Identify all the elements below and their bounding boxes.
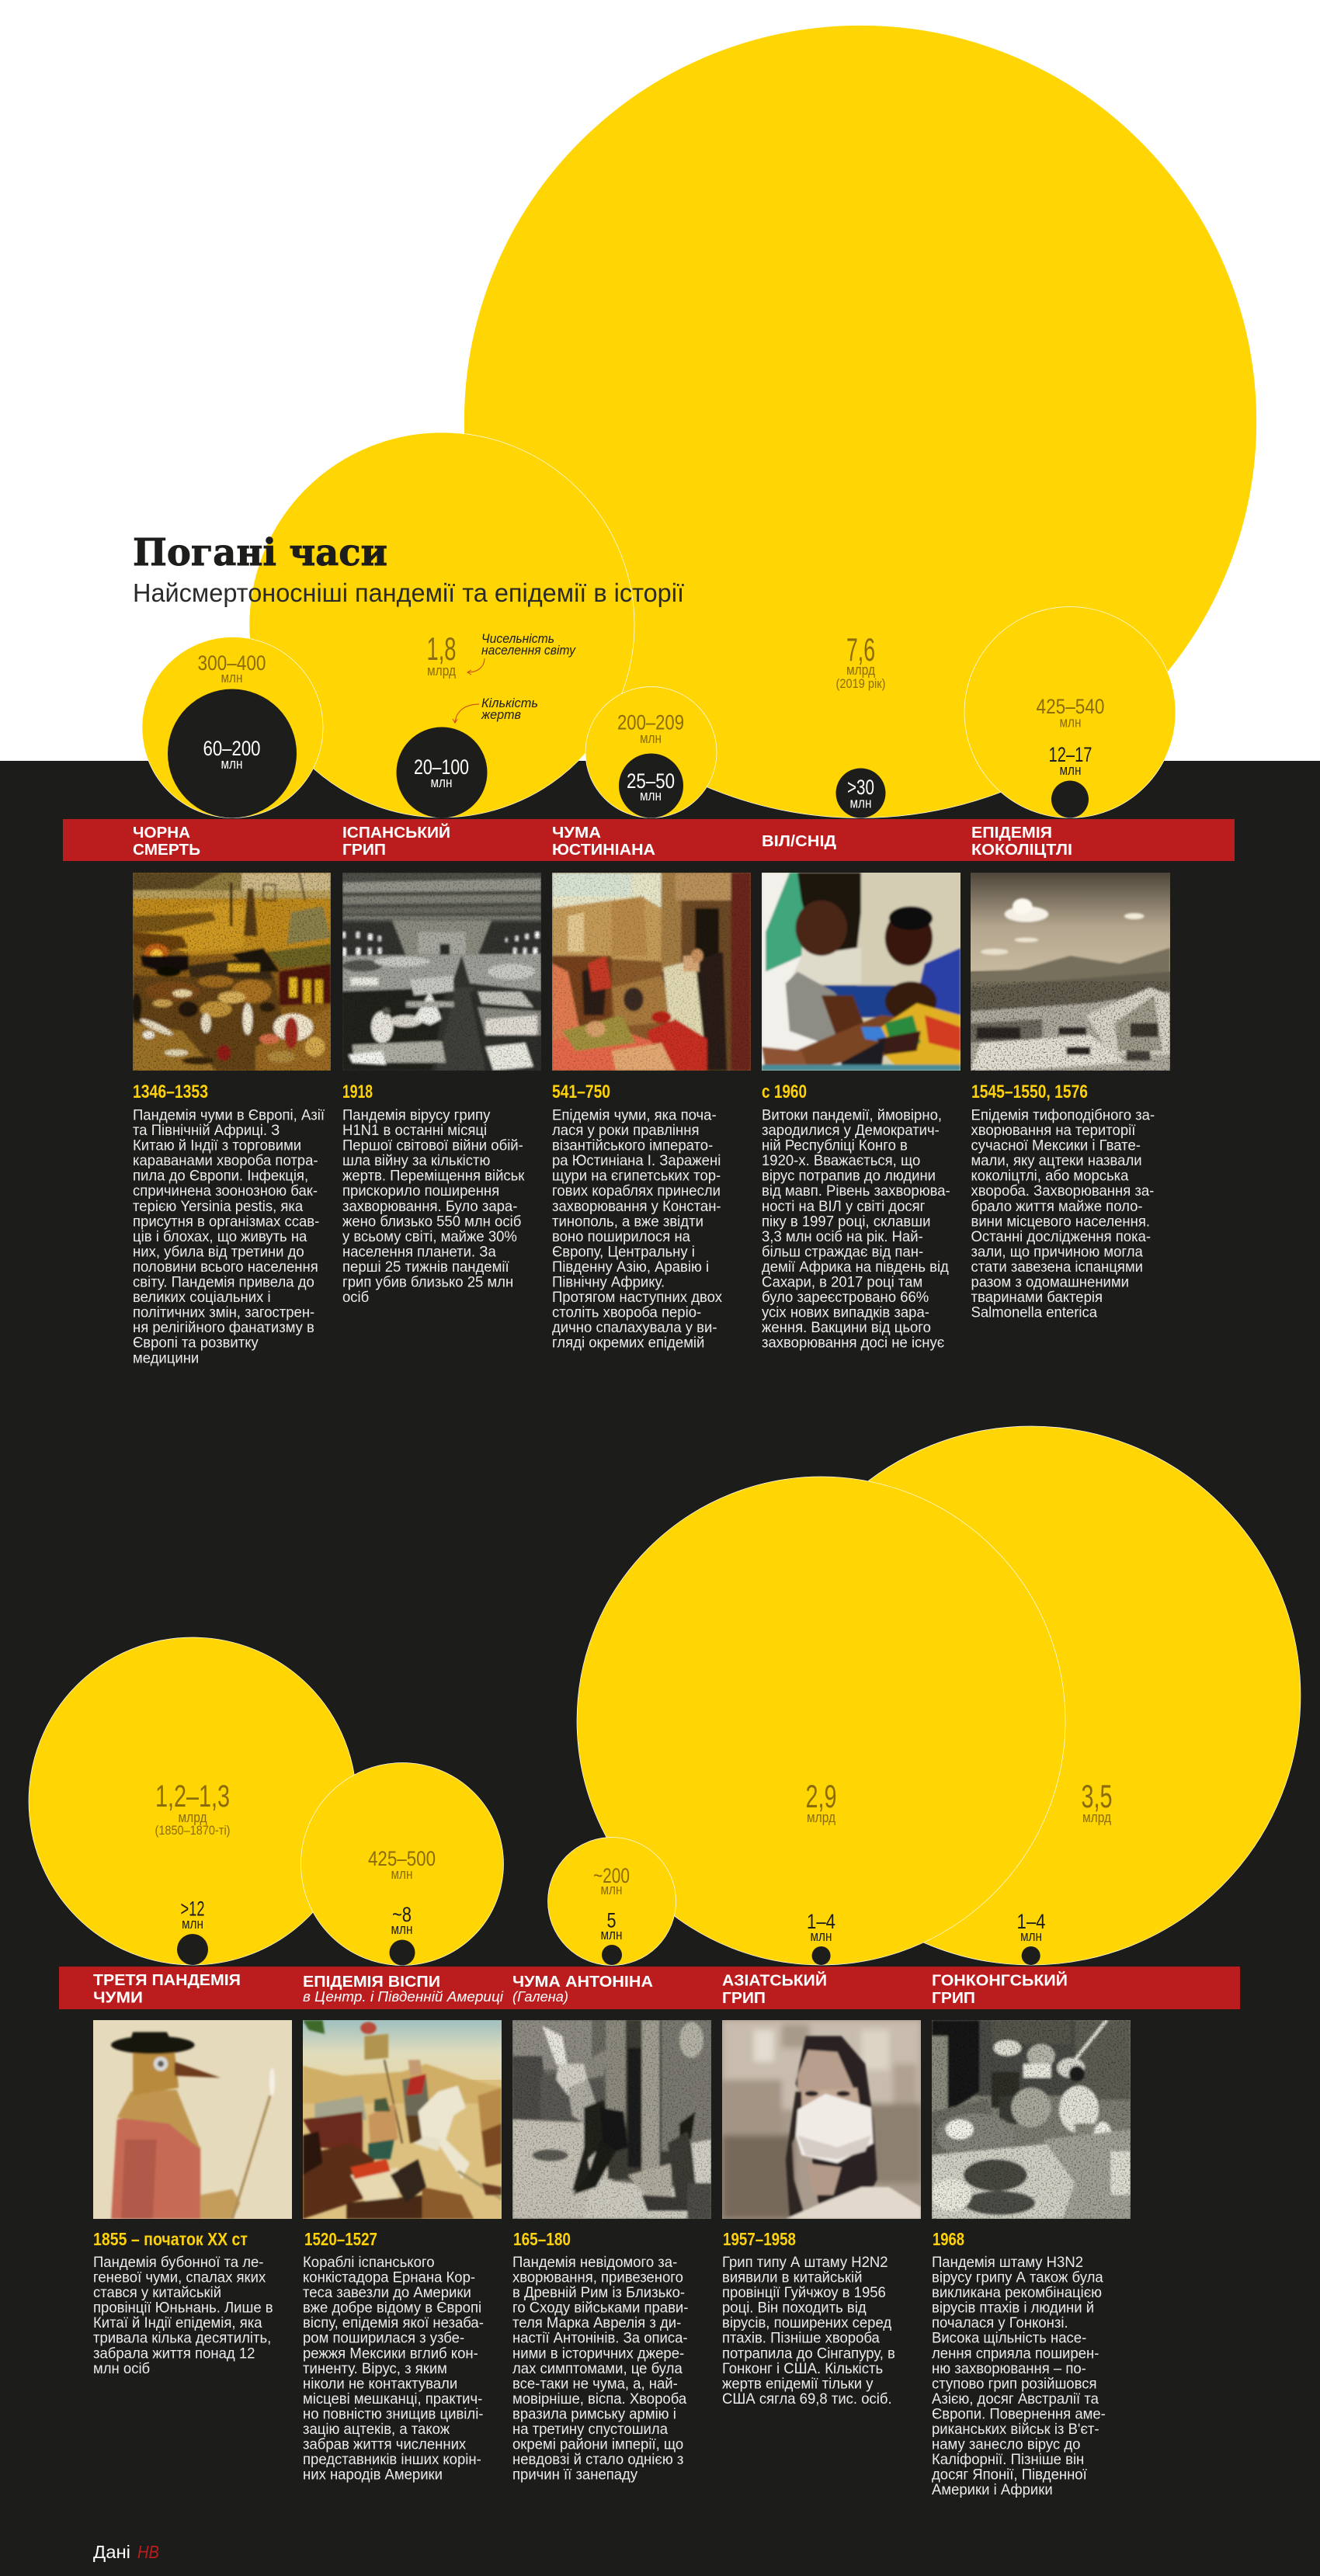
- heading: ГРИП: [932, 1990, 975, 2007]
- body text: спричинена зоонозною бак-: [133, 1182, 318, 1199]
- body text: невдовзі й стало однією з: [512, 2451, 683, 2467]
- heading: КОКОЛІЦТЛІ: [971, 842, 1072, 859]
- body text: місцеві мешканці, практич-: [303, 2390, 482, 2407]
- bubble: Asian flu: млрд: [807, 1810, 835, 1825]
- body text: перші 25 тижнів пандемії: [342, 1258, 509, 1275]
- body text: стався у китайській: [93, 2284, 221, 2300]
- body text: хворювання на території: [971, 1122, 1136, 1138]
- body text: мали, яку ацтеки назвали: [971, 1152, 1142, 1168]
- bubble: Smallpox epidemic: 425–500: [368, 1847, 436, 1870]
- bubble chart: second row of epidemics: [29, 1426, 1301, 1966]
- body text: ній Республіці Конго в: [762, 1137, 908, 1154]
- body text: Китаю й Індії з торговими: [133, 1137, 301, 1154]
- body text: но повністю знищив цивілі-: [303, 2405, 483, 2422]
- panel: Spanish flu: [342, 823, 541, 1305]
- body text: конкістадора Ернана Кор-: [303, 2269, 475, 2286]
- bubble: Black Death: млн: [221, 670, 242, 686]
- heading: ІСПАНСЬКИЙ: [342, 823, 450, 842]
- body text: тинополь, а вже звідти: [552, 1213, 703, 1229]
- body text: вірус потрапив до людини: [762, 1167, 936, 1184]
- panel: Cocoliztli epidemic: [971, 825, 1170, 1321]
- body text: брало життя майже поло-: [971, 1198, 1143, 1214]
- heading: [93, 1972, 241, 2006]
- body text: політичних змін, загострен-: [133, 1304, 314, 1321]
- body text: дично спалахувала у ви-: [552, 1319, 717, 1335]
- bubble: HIV/AIDS: 7,6: [846, 631, 875, 668]
- panel: Plague of Justinian: [552, 825, 751, 1351]
- heading: ЮСТИНІАНА: [552, 842, 655, 859]
- body text: грип убив близько 25 млн: [342, 1273, 513, 1290]
- bubble: Spanish flu: млрд: [427, 663, 456, 679]
- heading: ГРИП: [342, 842, 386, 859]
- panel: Black Death: [132, 825, 331, 1366]
- body text: тиненту. Вірус, з яким: [303, 2360, 447, 2376]
- body text: них народів Америки: [303, 2466, 443, 2483]
- bubble: Antonine plague: 5: [607, 1908, 617, 1932]
- bubble: Third plague pandemic: [29, 1637, 356, 1965]
- heading: [552, 825, 655, 859]
- body text: наму занесло вірус до: [932, 2435, 1080, 2453]
- bubble: Hong Kong flu: млрд: [1082, 1810, 1111, 1825]
- body text: караванами хвороба потра-: [133, 1152, 318, 1168]
- bubble: Asian flu: млн: [811, 1929, 832, 1944]
- heading: СМЕРТЬ: [133, 842, 200, 859]
- bubble: Black Death: 300–400: [197, 651, 266, 675]
- body text: ності на ВІЛ у світі досяг: [762, 1198, 926, 1214]
- body text: мовірніше, віспа. Хвороба: [512, 2390, 687, 2407]
- body text: віспу, епідемія якої незаба-: [303, 2314, 484, 2331]
- body text: Пандемія бубонної та ле-: [93, 2254, 263, 2270]
- bubble: Cocoliztli epidemic: 425–540: [1036, 695, 1104, 718]
- bubble: Antonine plague: ~200: [593, 1864, 630, 1887]
- body text: присутня в організмах ссав-: [133, 1213, 319, 1229]
- body text: пила до Європи. Інфекція,: [133, 1167, 308, 1184]
- bubble: Hong Kong flu: 1–4: [1017, 1910, 1045, 1933]
- bubble: Third plague pandemic: 1,2–1,3: [155, 1779, 230, 1814]
- body text: окремі райони імперії, що: [512, 2435, 683, 2453]
- body text: ження. Вакцини від цього: [762, 1319, 931, 1335]
- body text: Китаї й Індії епідемія, яка: [93, 2314, 262, 2331]
- date: 165–180: [513, 2229, 571, 2249]
- heading: [932, 1970, 1068, 2007]
- body text: на третину спустошила: [512, 2421, 669, 2437]
- body text: Висока щільність насе-: [932, 2330, 1086, 2346]
- heading: ВІЛ/СНІД: [762, 833, 836, 850]
- body text: хворювання, привезеного: [512, 2269, 683, 2286]
- body text: Кораблі іспанського: [303, 2254, 435, 2270]
- body text: теса завезли до Америки: [303, 2284, 471, 2300]
- panel: Third plague pandemic: [93, 1972, 292, 2376]
- bubble: Smallpox epidemic: ~8: [392, 1903, 412, 1926]
- bubble: Plague of Justinian: млн: [640, 731, 662, 746]
- bubble: Cocoliztli epidemic: млн: [1059, 762, 1081, 778]
- legend note: number of victims: Кількість: [481, 696, 538, 710]
- bubble: Smallpox epidemic: [301, 1762, 503, 1966]
- bubble: Hong Kong flu: 3,5: [1081, 1778, 1112, 1814]
- title block: [133, 531, 684, 607]
- heading: [133, 825, 200, 859]
- bubble: Plague of Justinian: 200–209: [617, 711, 684, 734]
- date: 1346–1353: [133, 1081, 208, 1102]
- bubble: Plague of Justinian: [585, 686, 717, 818]
- bubble: Asian flu: 2,9: [806, 1778, 837, 1814]
- body text: великих соціальних і: [133, 1289, 271, 1305]
- body text: ними в історичних джере-: [512, 2345, 684, 2361]
- body text: 3,3 млн осіб на рік. Най-: [762, 1228, 923, 1245]
- red heading band: second row: [59, 1967, 1240, 2009]
- body text: захворювання. Було зара-: [342, 1198, 517, 1214]
- body text: зацію ацтеків, а також: [303, 2421, 450, 2437]
- body text: ня релігійного фанатизму в: [133, 1319, 314, 1335]
- photo: poultry market: [932, 2020, 1131, 2219]
- body text: птахів. Пізніше хвороба: [722, 2330, 880, 2346]
- legend note: world population: [467, 631, 576, 675]
- bubble: Asian flu: [577, 1477, 1065, 1965]
- body text: Першої світової війни обій-: [342, 1137, 523, 1154]
- body text: провінції Юньнань. Лише в: [93, 2299, 273, 2316]
- body text: населення планети. За: [342, 1243, 496, 1260]
- photo: child receiving care: [762, 873, 960, 1071]
- body text: Америки і Африки: [932, 2481, 1053, 2498]
- body text: вірусів, поширених серед: [722, 2314, 891, 2331]
- photo: field hospital ward: [342, 873, 541, 1071]
- body text: піку в 1997 році, склавши: [762, 1213, 930, 1229]
- body text: Європу, Центральну і: [552, 1243, 695, 1260]
- body text: Епідемія чуми, яка поча-: [552, 1106, 717, 1123]
- body text: лася у роки правління: [552, 1122, 700, 1138]
- body text: коколіцтлі, або морська: [971, 1167, 1129, 1184]
- date: 541–750: [552, 1081, 610, 1102]
- bubble: Antonine plague: млн: [601, 1882, 623, 1897]
- panel: Antonine plague: [512, 1974, 711, 2483]
- body text: Гонконг і США. Кількість: [722, 2360, 883, 2376]
- body text: причин її занепаду: [512, 2466, 638, 2483]
- body text: ра Юстиніана І. Заражені: [552, 1152, 721, 1168]
- title: Погані часи: [133, 531, 387, 575]
- bubble: Antonine plague: [548, 1837, 676, 1966]
- panel: HIV/AIDS: [762, 833, 960, 1351]
- body text: Salmonella enterica: [971, 1304, 1098, 1321]
- body text: лах симптомами, це була: [512, 2360, 683, 2376]
- heading: (Галена): [512, 1989, 568, 2005]
- bubble: Antonine plague: млн: [601, 1927, 623, 1942]
- bubble: Cocoliztli epidemic: [964, 607, 1176, 818]
- body text: Північну Африку.: [552, 1273, 665, 1290]
- date: 1520–1527: [304, 2229, 377, 2249]
- body text: Пандемія чуми в Європі, Азії: [133, 1106, 325, 1123]
- photo: woman in a medical mask: [722, 2020, 921, 2219]
- bubble: Spanish flu: 1,8: [427, 630, 457, 667]
- date: 1918: [342, 1081, 373, 1102]
- bubble: Spanish flu: 20–100: [414, 755, 469, 779]
- body text: половини всього населення: [133, 1258, 318, 1275]
- body text: століть хвороба періо-: [552, 1304, 701, 1321]
- body text: вини місцевого населення.: [971, 1213, 1150, 1229]
- body text: та Північній Африці. З: [133, 1122, 280, 1138]
- body text: Пандемія невідомого за-: [512, 2254, 677, 2270]
- body text: вірусу грипу А також була: [932, 2269, 1103, 2286]
- body text: жертв епідемії тільки у: [722, 2375, 874, 2391]
- date: с 1960: [762, 1081, 807, 1102]
- bubble: Black Death: 60–200: [203, 737, 261, 760]
- bubble: HIV/AIDS: (2019 рік): [835, 676, 885, 691]
- body text: захворювання досі не існує: [762, 1335, 945, 1351]
- heading: в Центр. і Південній Америці: [303, 1989, 504, 2005]
- body text: провінції Гуйчжоу в 1956: [722, 2284, 886, 2300]
- body text: демії Африка на південь від: [762, 1258, 949, 1275]
- heading: ЧУМА АНТОНІНА: [512, 1974, 653, 1991]
- source credit: НВ: [137, 2542, 159, 2562]
- body text: сучасної Мексики і Гвате-: [971, 1137, 1141, 1154]
- legend note: number of victims: жертв: [481, 707, 521, 722]
- body text: ців і блохах, що живуть на: [133, 1228, 307, 1245]
- body text: зародилися у Демократич-: [762, 1122, 940, 1138]
- heading: АЗІАТСЬКИЙ: [722, 1970, 827, 1989]
- body text: почалася у Гонконзі.: [932, 2314, 1068, 2331]
- heading: ЧУМИ: [93, 1989, 143, 2006]
- bubble: Third plague pandemic: млн: [182, 1916, 203, 1932]
- body text: гляді окремих епідемій: [552, 1335, 704, 1351]
- bubble: Spanish flu: [249, 432, 634, 818]
- body text: візантійського імперато-: [552, 1137, 713, 1154]
- body text: ром поширилася з узбе-: [303, 2330, 464, 2346]
- heading: ГОНКОНГСЬКИЙ: [932, 1970, 1068, 1989]
- date: 1855 – початок ХХ ст: [93, 2229, 248, 2249]
- date: 1968: [933, 2229, 964, 2249]
- body text: вже добре відому в Європі: [303, 2299, 481, 2316]
- body text: більш страждає від пан-: [762, 1243, 923, 1260]
- bubble: Asian flu: 1–4: [807, 1910, 835, 1933]
- body text: хвороба. Захворювання за-: [971, 1182, 1154, 1199]
- heading: [303, 1974, 504, 2005]
- panel: Smallpox epidemic: [303, 1974, 504, 2483]
- body text: вразила римську армію і: [512, 2405, 676, 2422]
- body text: жено близько 550 млн осіб: [342, 1213, 521, 1229]
- heading: [342, 823, 450, 859]
- body text: захворювання у Констан-: [552, 1198, 721, 1214]
- heading: ЧОРНА: [133, 825, 190, 842]
- heading: ЕПІДЕМІЯ ВІСПИ: [303, 1974, 440, 1991]
- body text: було зареєстровано 66%: [762, 1289, 929, 1305]
- photo: plague doctor illustration: [93, 2020, 292, 2219]
- heading: ГРИП: [722, 1990, 766, 2007]
- body text: Останні дослідження пока-: [971, 1228, 1151, 1245]
- body text: прискорило поширення: [342, 1182, 499, 1199]
- bubble: Third plague pandemic: млрд: [179, 1810, 207, 1825]
- bubble: HIV/AIDS: >30: [847, 776, 874, 799]
- body text: гових кораблях принесли: [552, 1182, 721, 1199]
- red heading band: first row: [63, 819, 1235, 861]
- body text: усіх нових випадків зара-: [762, 1304, 929, 1321]
- body text: досяг Японії, Південної: [932, 2466, 1088, 2483]
- date: 1545–1550, 1576: [971, 1081, 1088, 1102]
- photo: Teotihuacan landscape: [971, 873, 1170, 1071]
- body text: них, убила від третини до: [133, 1243, 304, 1260]
- body text: Азією, досяг Австралії та: [932, 2390, 1099, 2407]
- body text: Протягом наступних двох: [552, 1289, 723, 1305]
- body text: Пандемія вірусу грипу: [342, 1106, 491, 1123]
- heading: [722, 1970, 827, 2007]
- body text: викликана рекомбінацією: [932, 2284, 1102, 2300]
- body text: представників інших корін-: [303, 2451, 481, 2467]
- bubble: HIV/AIDS: [464, 25, 1256, 818]
- body text: го Сходу військами прави-: [512, 2299, 688, 2316]
- photo: Triumph of Death painting: [133, 873, 331, 1071]
- bubble: Third plague pandemic: >12: [180, 1897, 205, 1921]
- body text: виявили в китайській: [722, 2269, 862, 2286]
- body text: терією Yersinia pestis, яка: [133, 1198, 304, 1214]
- source credit: [93, 2542, 159, 2562]
- body text: геневої чуми, спалах яких: [93, 2269, 266, 2286]
- legend note: world population: Чисельність: [481, 631, 554, 646]
- body text: лення сприяла поширен-: [932, 2345, 1099, 2361]
- body text: Грип типу А штаму H2N2: [722, 2254, 888, 2270]
- bubble: Smallpox epidemic: млн: [391, 1866, 413, 1882]
- body text: Сахари, в 2017 році там: [762, 1273, 922, 1290]
- legend note: world population: населення світу: [481, 643, 576, 658]
- body text: Витоки пандемії, ймовірно,: [762, 1106, 942, 1123]
- bubble: Plague of Justinian: млн: [640, 788, 662, 804]
- photo: angel of death engraving: [512, 2020, 711, 2219]
- body text: Каліфорнії. Пізніше він: [932, 2451, 1084, 2467]
- body text: осіб: [342, 1289, 369, 1305]
- subtitle: Найсмертоносніші пандемії та епідемії в історії: [133, 578, 684, 607]
- heading: ЕПІДЕМІЯ: [971, 825, 1052, 842]
- body text: тривала кілька десятиліть,: [93, 2330, 271, 2346]
- heading: ЧУМА: [552, 825, 601, 842]
- bubble: HIV/AIDS: млн: [849, 795, 871, 811]
- body text: зали, що причиною могла: [971, 1243, 1143, 1260]
- body text: H1N1 в останні місяці: [342, 1122, 487, 1138]
- body text: медицини: [133, 1349, 199, 1366]
- body text: 1920-х. Вважається, що: [762, 1152, 920, 1168]
- body text: Південну Азію, Аравію і: [552, 1258, 709, 1275]
- body text: воно поширилося на: [552, 1228, 691, 1245]
- source credit: Дані: [93, 2542, 130, 2562]
- body text: теля Марка Аврелія з ди-: [512, 2314, 681, 2331]
- body text: у всьому світі, майже 30%: [342, 1228, 517, 1245]
- body text: разом з одомашненими: [971, 1273, 1129, 1290]
- background: dark lower area: [0, 761, 1320, 2576]
- body text: ступово грип розійшовся: [932, 2375, 1097, 2391]
- body text: Європи. Повернення аме-: [932, 2405, 1106, 2422]
- body text: жертв. Переміщення військ: [342, 1167, 525, 1184]
- body text: вірусів птахів і людини й: [932, 2299, 1094, 2316]
- bubble: Cocoliztli epidemic: млн: [1059, 714, 1081, 730]
- body text: Європі та розвитку: [133, 1335, 259, 1351]
- bubble: Third plague pandemic: (1850–1870-ті): [155, 1823, 230, 1838]
- body text: шла війну за кількістю: [342, 1152, 490, 1168]
- body text: все-таки не чума, а, най-: [512, 2375, 678, 2391]
- body text: риканських військ із В'єт-: [932, 2421, 1099, 2437]
- body text: режжя Мексики вглиб кон-: [303, 2345, 478, 2361]
- photo: plague painting: [552, 873, 751, 1071]
- bubble: Plague of Justinian: 25–50: [627, 769, 675, 793]
- body text: Епідемія тифоподібного за-: [971, 1106, 1155, 1123]
- bubble: Cocoliztli epidemic: 12–17: [1048, 743, 1092, 766]
- panel: Asian flu: [722, 1970, 921, 2407]
- bubble chart: first row of epidemics: [142, 25, 1256, 818]
- body text: світу. Пандемія привела до: [133, 1273, 314, 1290]
- body text: настії Антонінів. За описа-: [512, 2330, 688, 2346]
- heading: [512, 1974, 653, 2005]
- body text: потрапила до Сінгапуру, в: [722, 2345, 895, 2361]
- body text: млн осіб: [93, 2360, 150, 2376]
- heading: ТРЕТЯ ПАНДЕМІЯ: [93, 1972, 241, 1989]
- body text: забрав життя численних: [303, 2435, 467, 2453]
- body text: в Древній Рим із Близько-: [512, 2284, 685, 2300]
- photo: conquest painting: [303, 2020, 502, 2219]
- body text: Пандемія штаму H3N2: [932, 2254, 1083, 2270]
- bubble: Hong Kong flu: [762, 1426, 1301, 1965]
- body text: щури на єгипетських тор-: [552, 1167, 721, 1184]
- body text: ню захворювання – по-: [932, 2360, 1086, 2376]
- bubble: Hong Kong flu: млн: [1020, 1929, 1042, 1944]
- legend note: number of victims: [453, 696, 538, 723]
- bubble: Black Death: млн: [221, 756, 242, 772]
- bubble: Smallpox epidemic: млн: [391, 1922, 413, 1937]
- bubble: Black Death: [142, 637, 323, 818]
- body text: від мавп. Рівень захворюва-: [762, 1182, 950, 1199]
- body text: США сягла 69,8 тис. осіб.: [722, 2390, 892, 2407]
- bubble: HIV/AIDS: млрд: [846, 662, 875, 678]
- bubble: Spanish flu: млн: [430, 775, 452, 790]
- body text: році. Він походить від: [722, 2299, 867, 2316]
- body text: забрала життя понад 12: [93, 2345, 255, 2361]
- body text: тваринами бактерія: [971, 1289, 1103, 1305]
- heading: [971, 825, 1072, 859]
- date: 1957–1958: [723, 2229, 796, 2249]
- body text: ніколи не контактували: [303, 2375, 457, 2391]
- body text: стати завезена іспанцями: [971, 1258, 1143, 1275]
- panel: Hong Kong flu: [932, 1970, 1131, 2498]
